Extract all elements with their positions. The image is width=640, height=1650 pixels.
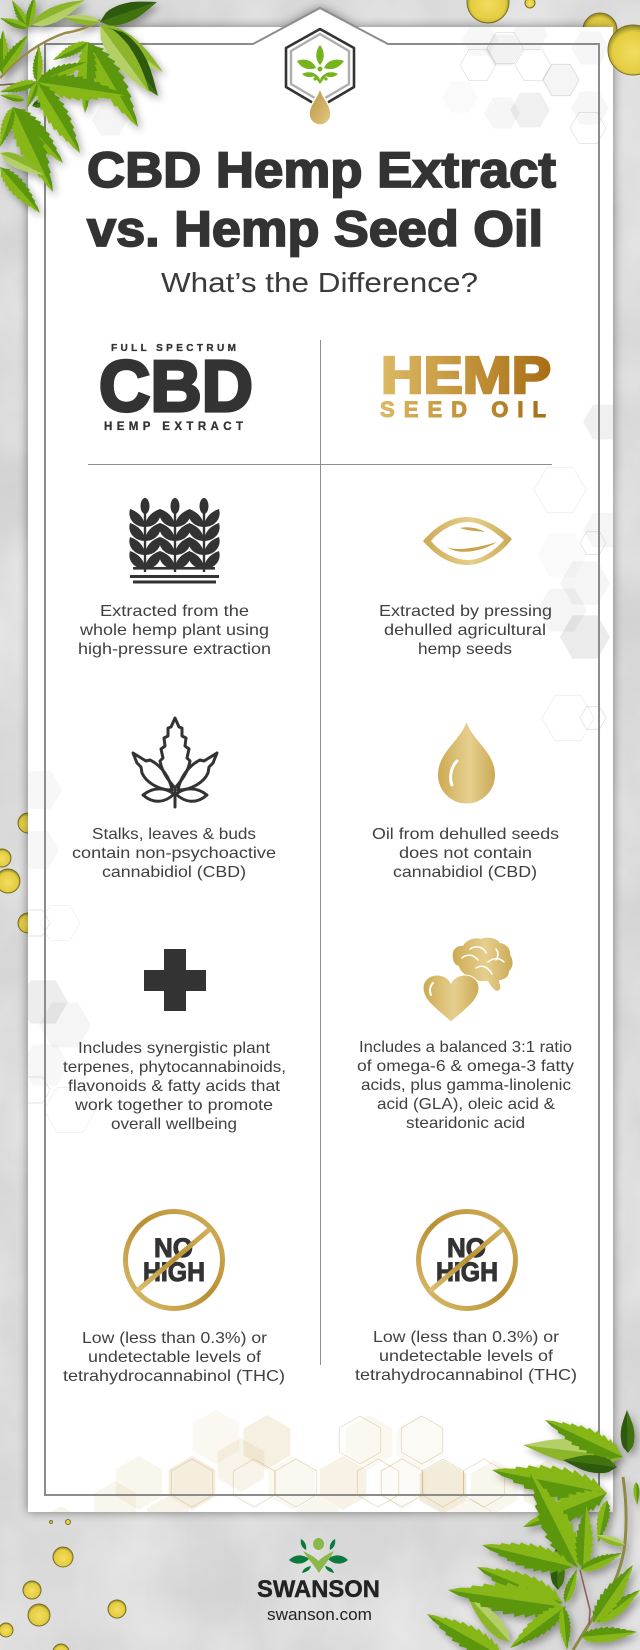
text: synergistic plant compounds: terpenes, phytocannabinoids, xyxy=(63,1059,286,1076)
heading: full spectrum CBD hemp extract: FULL SPECTRUM xyxy=(111,343,236,354)
icon: no high left: HIGH xyxy=(143,1257,205,1287)
subtitle: What’s the Difference? xyxy=(161,267,478,298)
icon: no high right: HIGH xyxy=(436,1257,498,1287)
text: extracted from whole plant: whole hemp plant using xyxy=(79,622,269,639)
heading: hemp seed oil xyxy=(380,347,551,422)
text: balanced omega ratio xyxy=(357,1039,574,1132)
text: extracted by pressing: dehulled agricultural xyxy=(384,622,546,639)
heading: full spectrum CBD hemp extract: HEMP EXTRACT xyxy=(104,421,243,433)
hemp leaves: top left xyxy=(0,0,169,219)
icon: brain and heart xyxy=(423,938,513,1022)
text: low THC left: undetectable levels of xyxy=(88,1349,262,1366)
text: extracted from whole plant: Extracted from the xyxy=(100,603,249,620)
heading: hemp seed oil: HEMP xyxy=(381,347,551,405)
text: balanced omega ratio: acids, plus gamma-linolenic xyxy=(361,1077,571,1094)
hexagon pattern: bottom gold xyxy=(51,1410,563,1512)
text: stalks leaves and buds: cannabidiol (CBD) xyxy=(102,864,246,881)
text: low THC left: Low (less than 0.3%) or xyxy=(82,1330,268,1347)
text: synergistic plant compounds xyxy=(63,1040,286,1133)
text: synergistic plant compounds: overall wellbeing xyxy=(111,1116,237,1133)
icon: no high right xyxy=(418,1212,516,1308)
text: balanced omega ratio: Includes a balanced 3:1 ratio xyxy=(359,1039,572,1056)
heading: hemp seed oil: SEED OIL xyxy=(380,397,546,422)
inner frame with peak xyxy=(45,8,599,1495)
text: stalks leaves and buds: contain non-psychoactive xyxy=(72,845,276,862)
icon: gold oil drop xyxy=(438,722,495,804)
text: stalks leaves and buds: Stalks, leaves & buds xyxy=(92,826,256,843)
text: oil from dehulled seeds: does not contain xyxy=(399,845,532,862)
icon: plus sign xyxy=(144,949,206,1011)
text: extracted by pressing: Extracted by pressing xyxy=(379,603,552,620)
text: low THC left: tetrahydrocannabinol (THC) xyxy=(63,1368,285,1385)
Swanson logo: swanson.com xyxy=(267,1606,372,1624)
text: extracted from whole plant: high-pressure extraction xyxy=(78,641,271,658)
text: oil from dehulled seeds: Oil from dehulled seeds xyxy=(372,826,559,843)
text: extracted by pressing xyxy=(379,603,552,658)
icon: gold seed xyxy=(423,517,512,565)
text: low THC right xyxy=(355,1329,577,1384)
title: CBD Hemp Extract xyxy=(87,142,556,198)
text: low THC right: undetectable levels of xyxy=(379,1348,554,1365)
Swanson logo: SWANSON xyxy=(257,1576,380,1603)
text: synergistic plant compounds: work together to promote xyxy=(74,1097,273,1114)
column dividers xyxy=(88,340,552,1365)
title xyxy=(87,142,556,257)
text: balanced omega ratio: stearidonic acid xyxy=(406,1115,525,1132)
text: balanced omega ratio: acid (GLA), oleic acid & xyxy=(377,1096,555,1113)
text: extracted by pressing: hemp seeds xyxy=(418,641,512,658)
text: oil from dehulled seeds: cannabidiol (CBD) xyxy=(393,864,537,881)
icon: wheat field xyxy=(129,498,220,584)
title: vs. Hemp Seed Oil xyxy=(87,201,543,257)
text: low THC left xyxy=(63,1330,285,1385)
text: synergistic plant compounds: flavonoids & fatty acids that xyxy=(68,1078,281,1095)
icon: no high left xyxy=(126,1212,222,1308)
text: low THC right: tetrahydrocannabinol (THC) xyxy=(355,1367,577,1384)
hemp leaves: bottom right xyxy=(421,1409,640,1650)
text: oil from dehulled seeds xyxy=(372,826,559,881)
text: extracted from whole plant xyxy=(78,603,271,658)
icon: no high right: NO xyxy=(447,1233,486,1263)
text: stalks leaves and buds xyxy=(72,826,276,881)
text: synergistic plant compounds: Includes synergistic plant xyxy=(78,1040,271,1057)
text: low THC right: Low (less than 0.3%) or xyxy=(373,1329,560,1346)
oil droplets behind card xyxy=(18,0,617,933)
icon: hemp leaf outline xyxy=(133,718,217,807)
hexagon pattern: grey xyxy=(15,19,623,1133)
icon: no high left: NO xyxy=(154,1233,193,1263)
heading: full spectrum CBD hemp extract: CBD xyxy=(99,347,253,427)
Swanson logo xyxy=(257,1538,380,1624)
text: balanced omega ratio: of omega-6 & omega-3 fatty xyxy=(357,1058,574,1075)
icon: top logo badge with drop xyxy=(286,29,354,125)
